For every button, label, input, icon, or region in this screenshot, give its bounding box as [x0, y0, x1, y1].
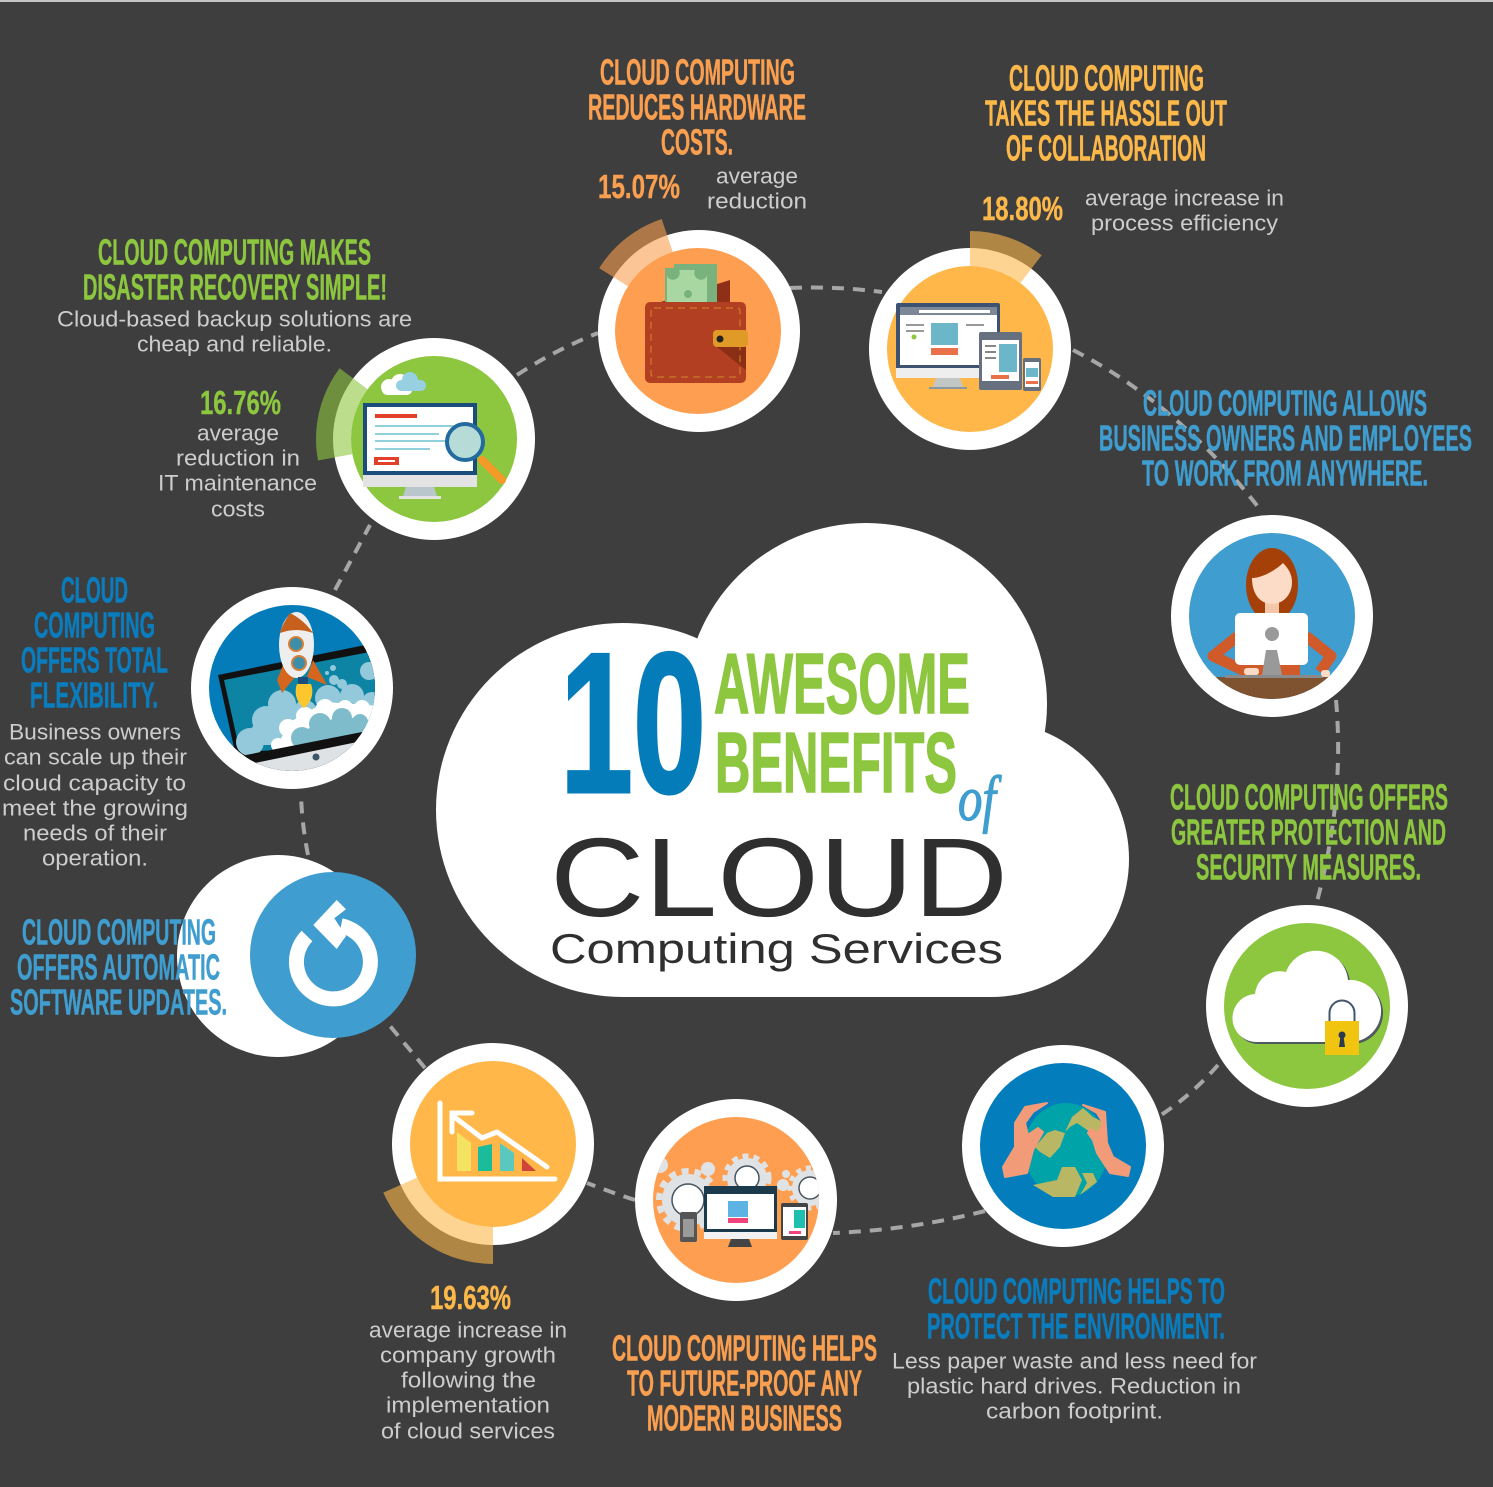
statistic caption	[369, 1318, 567, 1444]
description: Less paper waste and less need for	[892, 1349, 1257, 1374]
panel: protect the environment	[892, 1045, 1257, 1424]
panel: future-proof business	[612, 1099, 877, 1439]
dashed ring connecting the benefit circles	[301, 288, 1338, 1233]
statistic 15.07%: 15.07%	[598, 168, 680, 205]
heading: PROTECT THE ENVIRONMENT.	[927, 1306, 1225, 1347]
title: benefits: BENEFITS	[715, 716, 957, 811]
heading	[1099, 383, 1472, 494]
description: Business owners	[9, 720, 181, 745]
statistic caption: of cloud services	[381, 1419, 555, 1444]
heading	[927, 1271, 1225, 1347]
description	[2, 720, 188, 871]
heading: COSTS.	[661, 122, 733, 163]
icon: cloud with padlock	[1232, 951, 1383, 1055]
heading	[588, 52, 806, 163]
description: cheap and reliable.	[137, 332, 332, 357]
heading: CLOUD COMPUTING	[22, 912, 216, 953]
panel: protection and security	[1170, 777, 1448, 1107]
description: needs of their	[23, 821, 167, 846]
statistic caption: following the	[401, 1368, 536, 1393]
icon: woman at computer	[1208, 548, 1336, 699]
heading	[1170, 777, 1448, 888]
percentage arc	[383, 1178, 493, 1264]
description: carbon footprint.	[986, 1399, 1163, 1424]
icon: wallet with cash	[645, 264, 748, 383]
title: 10: 10	[560, 612, 706, 835]
statistic caption: implementation	[386, 1393, 550, 1418]
heading: REDUCES HARDWARE	[588, 87, 806, 128]
heading: DISASTER RECOVERY SIMPLE!	[83, 267, 387, 308]
panel: reduces hardware costs	[588, 52, 807, 432]
statistic caption: average increase in	[1085, 186, 1284, 211]
panel: total flexibility	[2, 570, 393, 871]
heading	[10, 912, 227, 1023]
statistic caption	[707, 164, 807, 214]
heading: SOFTWARE UPDATES.	[10, 982, 227, 1023]
heading: FLEXIBILITY.	[30, 675, 158, 716]
statistic caption: reduction	[707, 189, 807, 214]
statistic caption: costs	[211, 497, 265, 522]
statistic caption: reduction in	[176, 446, 300, 471]
heading: MODERN BUSINESS	[647, 1398, 842, 1439]
heading	[21, 570, 168, 716]
icon: line and bar chart	[440, 1103, 555, 1179]
heading: CLOUD COMPUTING	[600, 52, 795, 93]
percentage arc	[970, 231, 1042, 283]
heading: CLOUD COMPUTING HELPS TO	[928, 1271, 1225, 1312]
heading: TAKES THE HASSLE OUT	[985, 93, 1227, 134]
panel: work from anywhere	[1099, 383, 1472, 717]
statistic caption: process efficiency	[1091, 211, 1278, 236]
percentage arc	[316, 368, 368, 460]
icon: rocket launching from laptop	[218, 612, 375, 771]
icon: hands holding globe	[1003, 1103, 1130, 1197]
description	[892, 1349, 1257, 1424]
heading: OFFERS TOTAL	[21, 640, 168, 681]
statistic caption	[158, 421, 317, 522]
heading: OF COLLABORATION	[1006, 128, 1206, 169]
description	[57, 307, 412, 357]
heading: CLOUD COMPUTING	[1009, 58, 1204, 99]
description: plastic hard drives. Reduction in	[907, 1374, 1241, 1399]
statistic caption: average	[197, 421, 279, 446]
panel: hassle-free collaboration	[869, 58, 1284, 450]
description: Cloud-based backup solutions are	[57, 307, 412, 332]
title: cloud: CLOUD	[550, 815, 1008, 940]
percentage arc	[599, 219, 673, 287]
icon: gears and devices	[652, 1156, 830, 1247]
title: computing services: Computing Services	[550, 925, 1003, 972]
panel: disaster recovery	[57, 232, 535, 540]
statistic 18.80%: 18.80%	[982, 190, 1063, 227]
panel: automatic software updates	[10, 855, 416, 1057]
statistic caption: average	[716, 164, 798, 189]
title: of: of	[958, 763, 1002, 834]
icon: responsive devices	[896, 303, 1041, 391]
description: meet the growing	[2, 796, 188, 821]
statistic caption: IT maintenance	[158, 471, 317, 496]
description: operation.	[42, 846, 148, 871]
heading	[612, 1328, 877, 1439]
statistic caption: average increase in	[369, 1318, 567, 1343]
statistic 19.63%: 19.63%	[430, 1279, 511, 1316]
heading	[985, 58, 1227, 169]
central cloud with title	[436, 523, 1129, 997]
icon: monitor and magnifier	[363, 372, 502, 499]
statistic caption: company growth	[380, 1343, 556, 1368]
panel: company growth	[369, 1043, 594, 1444]
icon: refresh arrow	[296, 900, 370, 999]
description: cloud capacity to	[3, 771, 186, 796]
heading	[83, 232, 387, 308]
heading: CLOUD COMPUTING MAKES	[98, 232, 371, 273]
heading: CLOUD COMPUTING HELPS	[612, 1328, 877, 1369]
heading: OFFERS AUTOMATIC	[17, 947, 220, 988]
heading: CLOUD	[61, 570, 128, 611]
description: can scale up their	[4, 745, 187, 770]
title: awesome: AWESOME	[714, 637, 970, 732]
statistic 16.76%: 16.76%	[200, 384, 281, 421]
heading: TO FUTURE-PROOF ANY	[627, 1363, 862, 1404]
heading: COMPUTING	[34, 605, 155, 646]
statistic caption	[1085, 186, 1284, 236]
